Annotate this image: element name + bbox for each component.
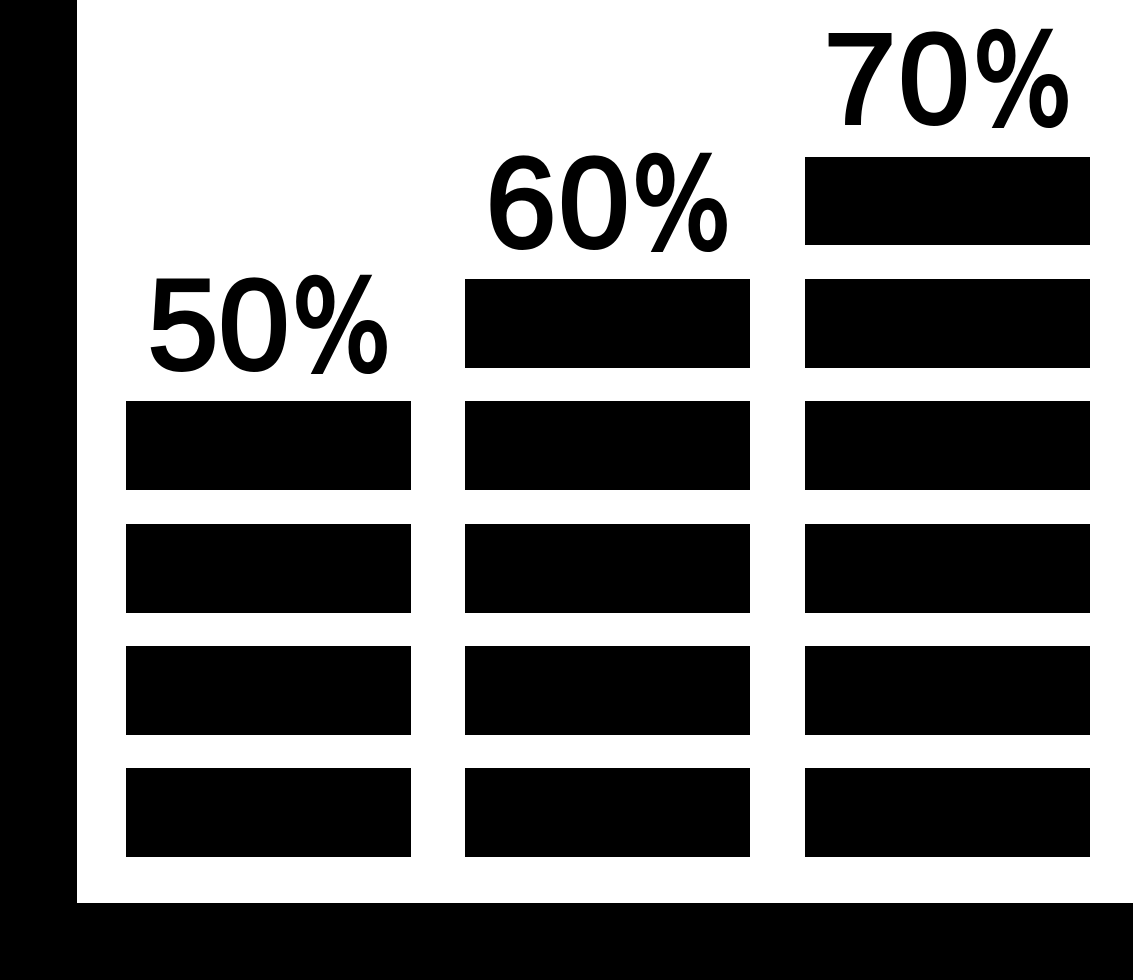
column: 70% [805,7,1090,857]
label: 70%: 0 [899,8,969,151]
bar stack: 70% [805,157,1090,857]
bar stack: 50% [126,401,411,857]
label: 50% [148,253,391,400]
label: 60% [486,131,731,278]
label: 70%: % [973,7,1072,154]
label: 70% [824,7,1072,154]
column: 60% [465,131,750,857]
label: 50%: % [292,253,391,400]
label: 50%: 0 [219,254,289,397]
label: 60%: % [632,131,731,278]
bar stack: 60% [465,279,750,857]
column: 50% [126,253,411,857]
label: 50%: 5 [148,254,218,397]
label: 70%: 7 [824,8,896,151]
label: 60%: 0 [559,132,629,275]
label: 60%: 6 [486,132,556,275]
